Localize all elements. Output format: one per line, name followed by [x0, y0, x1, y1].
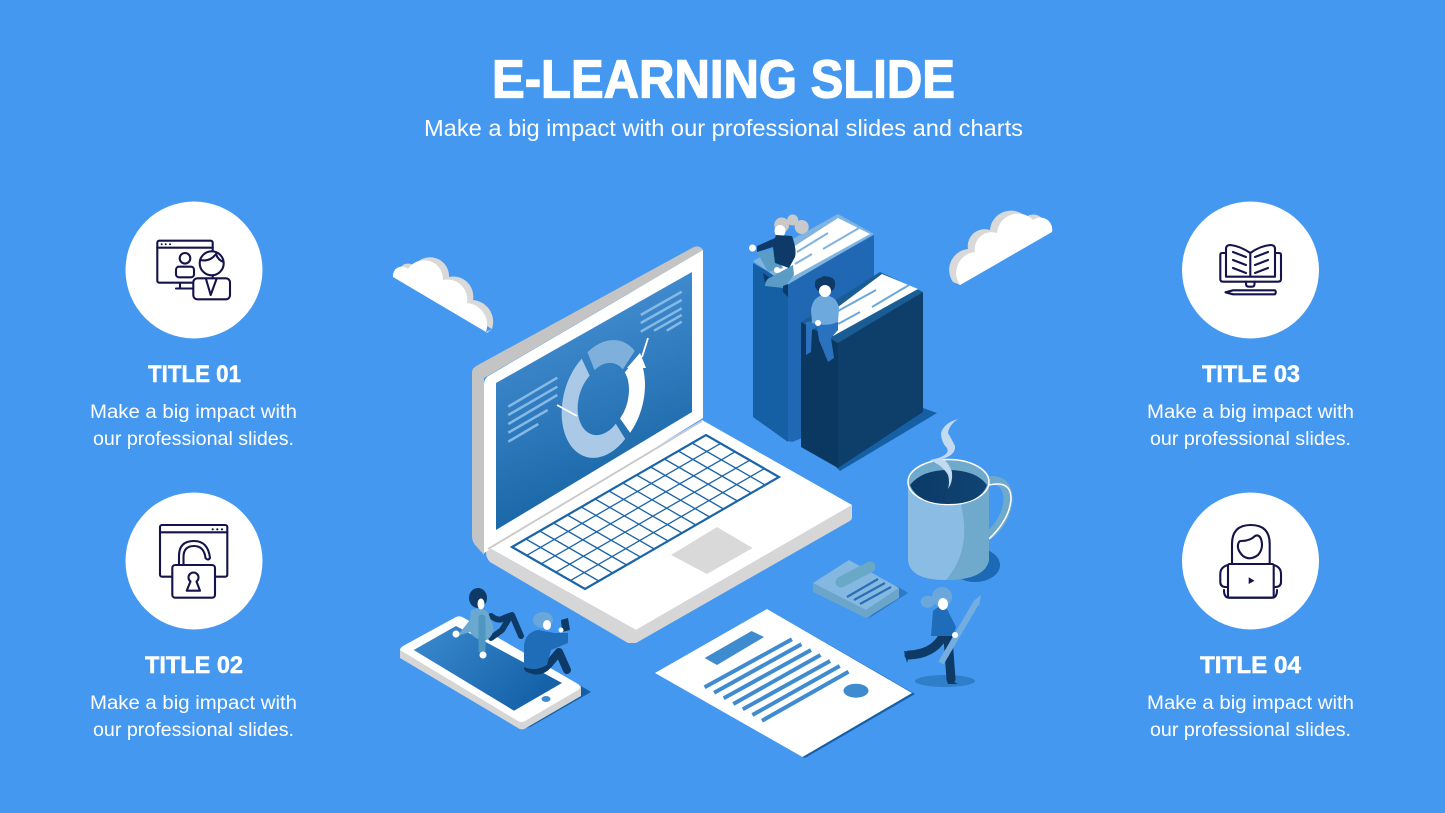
panel: title 03	[1147, 202, 1354, 450]
laptop lid	[472, 246, 703, 555]
heading: TITLE 04	[1200, 652, 1301, 679]
donut chart	[557, 338, 648, 455]
running person with pencil	[904, 587, 981, 687]
paper document	[655, 609, 915, 758]
right cloud	[949, 211, 1052, 285]
icon: browser padlock	[126, 492, 262, 630]
front book	[801, 272, 937, 471]
screen text lines	[508, 292, 682, 442]
description line 2: our professional slides.	[93, 429, 294, 450]
tablet	[400, 616, 591, 730]
description: Make a big impact with	[1147, 693, 1354, 714]
title: E-LEARNING SLIDE	[492, 50, 955, 110]
keyboard	[512, 435, 779, 589]
description: Make a big impact with	[90, 693, 297, 714]
person sitting on tablet, right	[524, 612, 570, 670]
description line 2: our professional slides.	[1150, 720, 1351, 741]
heading: TITLE 03	[1202, 361, 1300, 388]
heading: TITLE 01	[148, 361, 241, 388]
person on back book	[749, 214, 809, 297]
person on front book	[806, 276, 839, 362]
heading: TITLE 02	[145, 652, 243, 679]
panel: title 04	[1147, 492, 1354, 741]
panel: title 01	[90, 202, 297, 450]
description: Make a big impact with	[90, 402, 297, 423]
back book	[753, 214, 874, 442]
description line 2: our professional slides.	[1150, 429, 1351, 450]
icon: student at laptop	[1182, 492, 1319, 630]
notepad	[813, 560, 908, 619]
description line 2: our professional slides.	[93, 720, 294, 741]
panel: title 02	[90, 492, 297, 741]
description: Make a big impact with	[1147, 402, 1354, 423]
person sitting on tablet, left	[452, 588, 521, 658]
coffee mug	[908, 419, 1011, 582]
illustration: isometric e-learning scene	[393, 211, 1052, 758]
laptop	[472, 246, 852, 643]
left cloud	[393, 257, 493, 333]
icon: online tutor	[126, 202, 262, 338]
icon: open book and pencil	[1182, 202, 1319, 338]
laptop base	[486, 505, 852, 643]
laptop screen	[496, 272, 692, 530]
subtitle: Make a big impact with our professional slides and charts	[424, 115, 1023, 141]
trackpad	[671, 527, 752, 574]
